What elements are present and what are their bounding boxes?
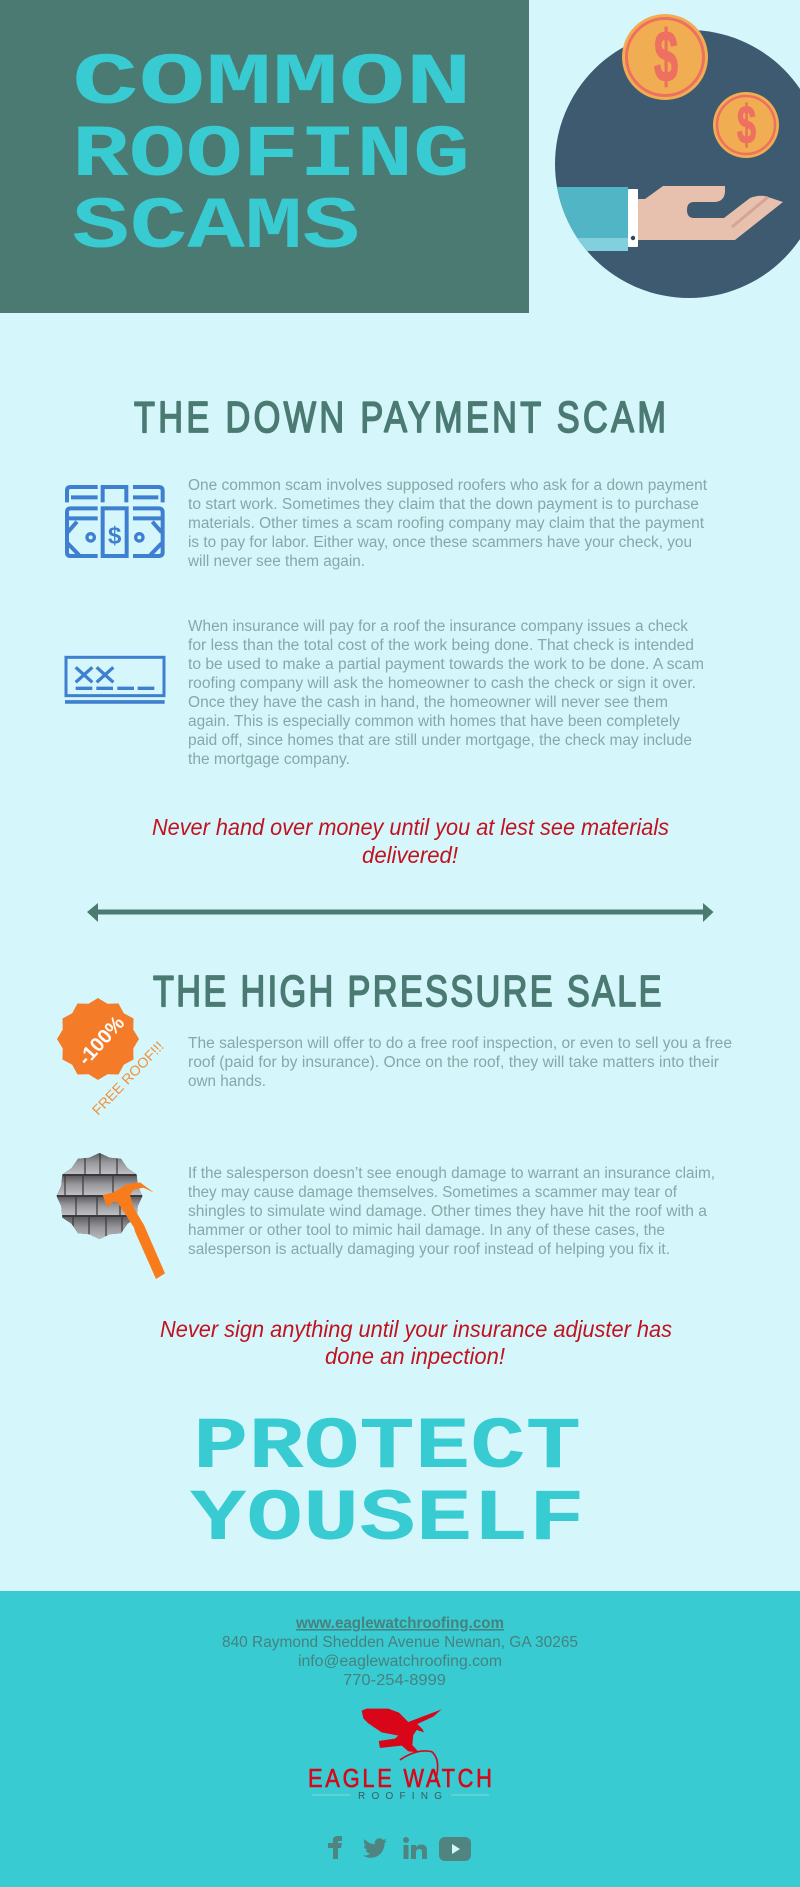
title: Common Roofing Scams: COMMON	[72, 42, 472, 125]
icon: stack of cash: $	[108, 523, 121, 550]
callout: never hand over money	[152, 814, 669, 868]
heading: The High Pressure Sale: THE HIGH PRESSURE SALE	[153, 967, 662, 1016]
text block: self-inflicted damage: shingles to simulate wind damage. Other times they have hit the roof with a	[188, 1203, 707, 1220]
icon: shingles and hammer	[50, 1150, 165, 1279]
title: Common Roofing Scams: ROOFING	[72, 114, 470, 197]
text block: insurance check scam: paid off, since homes that are still under mortgage, the check may include	[188, 732, 692, 749]
icon: youtube	[439, 1837, 471, 1861]
text block: insurance check scam: to be used to make a partial payment towards the work to be done. A scam	[188, 656, 704, 673]
icon: discount badge	[57, 998, 139, 1080]
text block: free roof offer: own hands.	[188, 1073, 266, 1090]
contact details: 770-254-8999	[343, 1672, 446, 1689]
contact details	[222, 1615, 578, 1689]
text block: down payment scam: will never see them again.	[187, 553, 365, 570]
text block: down payment scam: to start work. Sometimes they claim that the down payment is to purchase	[188, 496, 699, 513]
callout: never sign anything: Never sign anything until your insurance adjuster has	[160, 1316, 672, 1342]
text block: insurance check scam: Once they have the cash in hand, the homeowner will never see them	[188, 694, 668, 711]
heading: Protect Yourself: PROTECT	[193, 1406, 581, 1489]
illustration: hand catching coins	[550, 14, 800, 298]
logo: Eagle Watch Roofing: ROOFING	[358, 1791, 442, 1802]
contact details: info@eaglewatchroofing.com	[298, 1653, 502, 1670]
text block: self-inflicted damage: If the salesperson doesn’t see enough damage to warrant an insurance claim,	[188, 1165, 715, 1182]
text block: down payment scam: One common scam involves supposed roofers who ask for a down payment	[188, 477, 708, 494]
icon: small dollar coin: $	[737, 95, 756, 155]
text block: insurance check scam: for less than the total cost of the work being done. That check is intended	[188, 637, 694, 654]
icon: open hand with sleeve	[550, 186, 783, 251]
icon: blank check	[65, 657, 165, 702]
text block: free roof offer: The salesperson will offer to do a free roof inspection, or even to sell you a free	[188, 1035, 732, 1052]
label: free roof: FREE ROOF!!!	[89, 1038, 167, 1118]
text block: insurance check scam: the mortgage company.	[188, 751, 350, 768]
callout: never sign anything	[160, 1316, 672, 1369]
icon: large dollar coin: $	[654, 17, 678, 97]
contact details: 840 Raymond Shedden Avenue Newnan, GA 30265	[222, 1634, 578, 1651]
callout: never hand over money: delivered!	[362, 842, 459, 868]
icon: stack of cash	[67, 487, 163, 556]
heading: Protect Yourself	[190, 1406, 585, 1561]
title: Common Roofing Scams: SCAMS	[72, 186, 360, 269]
text block: free roof offer: roof (paid for by insurance). Once on the roof, they will take matters into their	[188, 1054, 719, 1071]
callout: never hand over money: Never hand over money until you at lest see materials	[152, 814, 669, 840]
text block: down payment scam: materials. Other times a scam roofing company may claim that the payment	[188, 515, 705, 532]
icon: small dollar coin	[713, 92, 779, 158]
text block: free roof offer	[188, 1035, 732, 1090]
callout: never sign anything: done an inpection!	[325, 1343, 506, 1369]
text block: self-inflicted damage: salesperson is actually damaging your roof instead of helping you fix it.	[188, 1241, 670, 1258]
panel: title header	[0, 0, 529, 313]
icon: linkedin	[403, 1837, 427, 1859]
title: Common Roofing Scams	[72, 42, 472, 269]
text block: insurance check scam	[188, 618, 704, 768]
contact details: www.eaglewatchroofing.com	[295, 1615, 504, 1632]
icon: facebook	[328, 1836, 342, 1859]
text block: self-inflicted damage: hammer or other tool to mimic hail damage. In any of these cases, the	[188, 1222, 665, 1239]
text block: self-inflicted damage	[188, 1165, 715, 1258]
heading: Protect Yourself: YOUSELF	[190, 1478, 585, 1561]
text block: insurance check scam: again. This is especially common with homes that have been completely	[188, 713, 680, 730]
panel: footer	[0, 1591, 800, 1887]
text block: down payment scam	[187, 477, 708, 570]
text block: insurance check scam: When insurance will pay for a roof the insurance company issues a check	[188, 618, 688, 635]
logo: Eagle Watch Roofing: EAGLE WATCH	[308, 1764, 492, 1793]
logo: Eagle Watch Roofing	[308, 1709, 492, 1802]
text block: down payment scam: is to pay for labor. Either way, once these scammers have your check, you	[188, 534, 692, 551]
icon: discount badge: -100%	[74, 1012, 129, 1070]
text block: self-inflicted damage: they may cause damage themselves. Sometimes a scammer may tear of	[188, 1184, 678, 1201]
icon: large dollar coin	[622, 14, 708, 100]
heading: The Down Payment Scam: THE DOWN PAYMENT SCAM	[134, 393, 666, 442]
icon: twitter	[363, 1838, 387, 1858]
text block: insurance check scam: roofing company will ask the homeowner to cash the check or sign it over.	[188, 675, 696, 692]
arrow: double-headed divider	[87, 903, 714, 922]
